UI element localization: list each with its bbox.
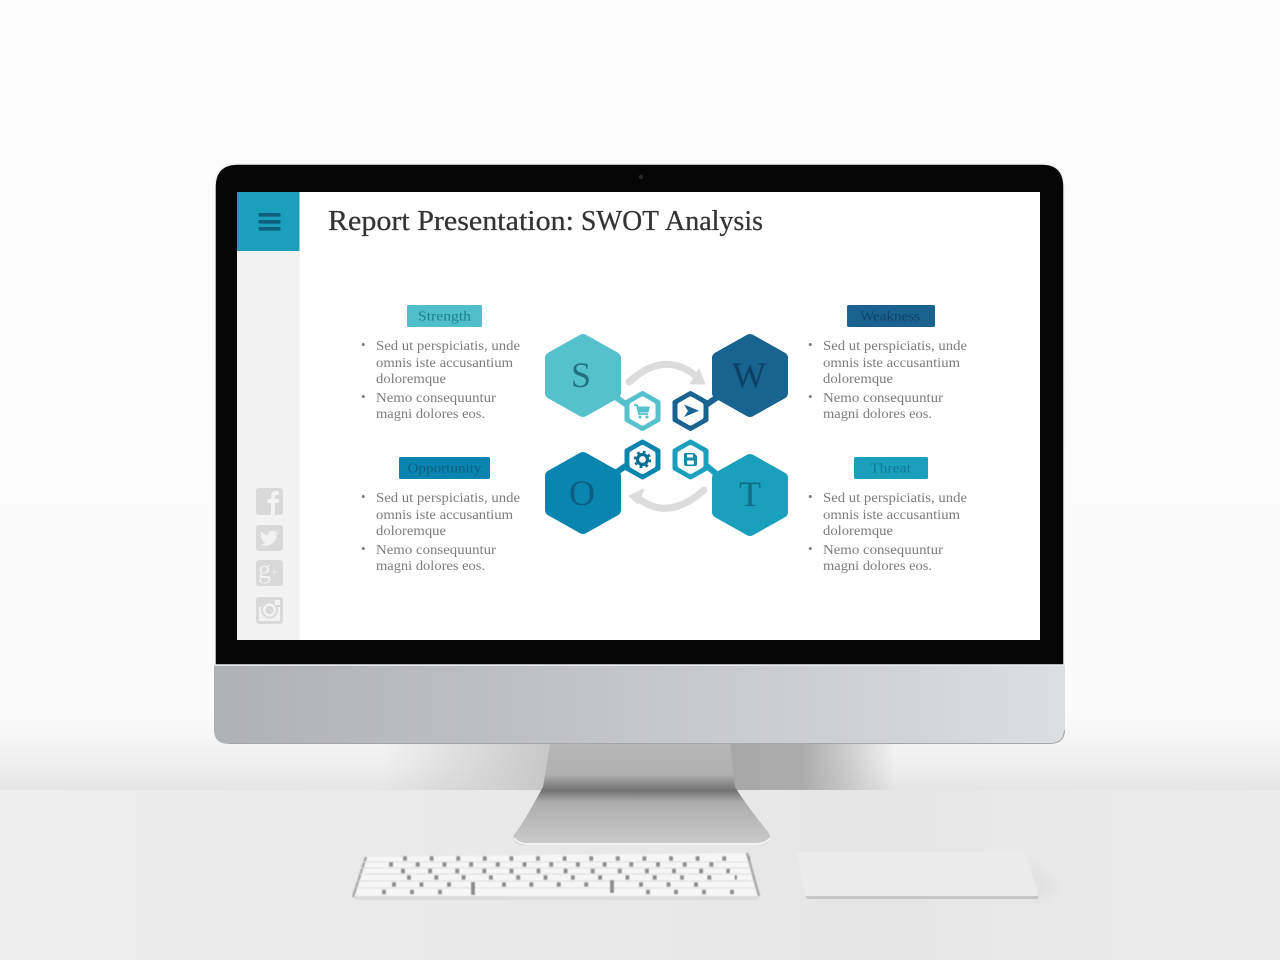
label tag: strength: Strength <box>418 310 471 324</box>
arrow: threat to opportunity <box>629 489 704 508</box>
bullet list: opportunity: • <box>361 489 366 504</box>
icon: google plus: g <box>258 555 271 584</box>
monitor stand <box>513 744 770 845</box>
title <box>328 206 763 237</box>
icon: floppy disk <box>684 453 697 466</box>
title: SWOT <box>581 206 659 237</box>
bullet list: threat: magni dolores eos. <box>823 559 932 574</box>
bullet list: opportunity: • <box>361 541 366 556</box>
hexagon S: S <box>571 355 591 395</box>
label tag: opportunity: Opportunity <box>408 462 482 476</box>
bullet list: threat: omnis iste accusantium <box>823 508 960 523</box>
bullet list: opportunity: Sed ut perspiciatis, unde <box>376 491 520 506</box>
keyboard <box>353 853 759 900</box>
icon: instagram <box>256 597 283 624</box>
bullet list: weakness: Nemo consequuntur <box>823 391 943 406</box>
panel: weakness <box>808 305 967 422</box>
icon: google plus: + <box>271 564 278 579</box>
hexagon T <box>674 442 782 530</box>
label tag: weakness: Weakness <box>860 310 920 324</box>
bullet list: threat: Sed ut perspiciatis, unde <box>823 491 967 506</box>
bullet list: weakness: • <box>808 337 813 352</box>
title: Analysis <box>665 206 763 237</box>
icon: gear <box>635 452 650 467</box>
panel: strength <box>361 305 520 422</box>
bullet list: threat: Nemo consequuntur <box>823 543 943 558</box>
bullet list: opportunity: magni dolores eos. <box>376 559 485 574</box>
bullet list: weakness: • <box>808 389 813 404</box>
bullet list: strength <box>361 337 520 422</box>
bullet list: strength: magni dolores eos. <box>376 407 485 422</box>
icon: google plus <box>256 555 283 586</box>
bullet list: opportunity: doloremque <box>376 524 446 539</box>
bullet list: strength: Nemo consequuntur <box>376 391 496 406</box>
bullet list: weakness: Sed ut perspiciatis, unde <box>823 339 967 354</box>
label tag: threat <box>854 457 928 479</box>
label tag: opportunity <box>399 457 490 479</box>
panel: threat <box>808 457 967 574</box>
bullet list: strength: • <box>361 389 366 404</box>
trackpad <box>797 852 1058 900</box>
bullet list: threat: • <box>808 541 813 556</box>
label tag: weakness <box>847 305 935 327</box>
bullet list: strength: doloremque <box>376 372 446 387</box>
sidebar <box>237 251 300 640</box>
bullet list: threat: doloremque <box>823 524 893 539</box>
bullet list: opportunity: omnis iste accusantium <box>376 508 513 523</box>
hexagon T: T <box>739 474 761 514</box>
icon: twitter <box>256 525 283 551</box>
arrow: strength to weakness <box>629 364 705 384</box>
monitor bezel <box>215 164 1064 665</box>
label tag: threat: Threat <box>870 462 911 476</box>
bullet list: strength: • <box>361 337 366 352</box>
bullet list: threat <box>808 489 967 574</box>
bullet list: threat: • <box>808 489 813 504</box>
hexagon W <box>674 340 782 429</box>
icon: send <box>684 404 699 417</box>
monitor chin <box>214 664 1065 744</box>
bullet list: strength: omnis iste accusantium <box>376 356 513 371</box>
bullet list: weakness: omnis iste accusantium <box>823 356 960 371</box>
hexagon O <box>551 442 658 528</box>
label tag: strength <box>407 305 482 327</box>
panel: opportunity <box>361 457 520 574</box>
hexagon W: W <box>732 355 766 395</box>
icon: cart <box>634 405 650 418</box>
bullet list: weakness: doloremque <box>823 372 893 387</box>
icon: facebook <box>256 488 283 515</box>
diagram: SWOT hexagons <box>551 340 782 530</box>
title: Report Presentation: <box>328 206 574 237</box>
slide screen <box>237 192 1040 640</box>
bullet list: weakness <box>808 337 967 422</box>
hexagon S <box>551 340 658 429</box>
bullet list: weakness: magni dolores eos. <box>823 407 932 422</box>
bullet list: opportunity: Nemo consequuntur <box>376 543 496 558</box>
bullet list: opportunity <box>361 489 520 574</box>
bullet list: strength: Sed ut perspiciatis, unde <box>376 339 520 354</box>
hexagon O: O <box>569 473 595 513</box>
menu tile with hamburger icon <box>237 192 300 251</box>
